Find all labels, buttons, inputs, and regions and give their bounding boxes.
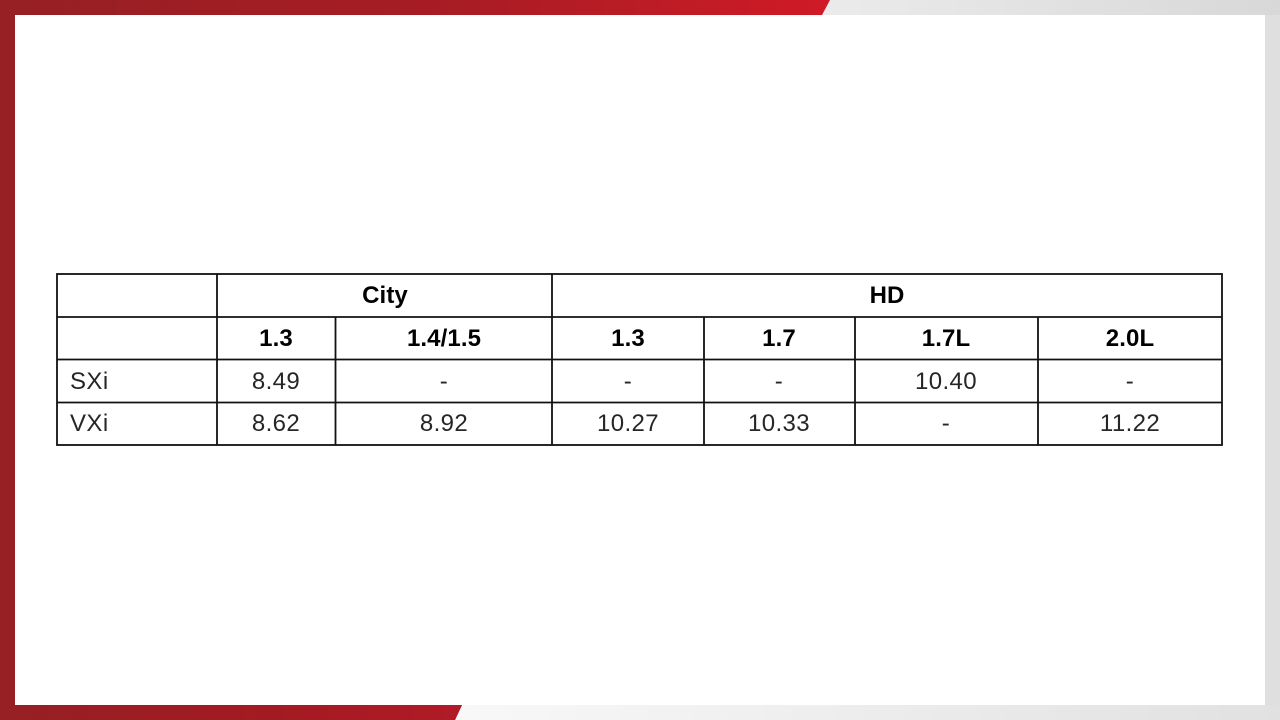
row: VXi: 11.22 — [1100, 410, 1160, 437]
row: SXi: - — [1126, 368, 1134, 395]
row: VXi — [70, 410, 1160, 437]
row: VXi: 10.33 — [748, 410, 810, 437]
group headers — [362, 282, 904, 309]
row: VXi: 8.92 — [420, 410, 468, 437]
row: SXi: - — [624, 368, 632, 395]
engine size headers — [259, 325, 1154, 352]
engine size headers: 1.7L — [922, 325, 970, 352]
row: SXi — [70, 368, 1134, 395]
row: SXi: 10.40 — [915, 368, 977, 395]
row: VXi: - — [942, 410, 950, 437]
row: SXi: - — [440, 368, 448, 395]
group headers: City — [362, 282, 408, 309]
engine size headers: 2.0L — [1106, 325, 1154, 352]
data table — [57, 274, 1222, 445]
table grid — [57, 274, 1222, 445]
group headers: HD — [870, 282, 904, 309]
engine size headers: 1.4/1.5 — [407, 325, 481, 352]
row: VXi: 10.27 — [597, 410, 659, 437]
row: VXi: VXi — [70, 410, 109, 437]
row: SXi: - — [775, 368, 783, 395]
engine size headers: 1.7 — [762, 325, 796, 352]
row: SXi: 8.49 — [252, 368, 300, 395]
engine size headers: 1.3 — [611, 325, 645, 352]
row: SXi: SXi — [70, 368, 109, 395]
row: VXi: 8.62 — [252, 410, 300, 437]
engine size headers: 1.3 — [259, 325, 293, 352]
